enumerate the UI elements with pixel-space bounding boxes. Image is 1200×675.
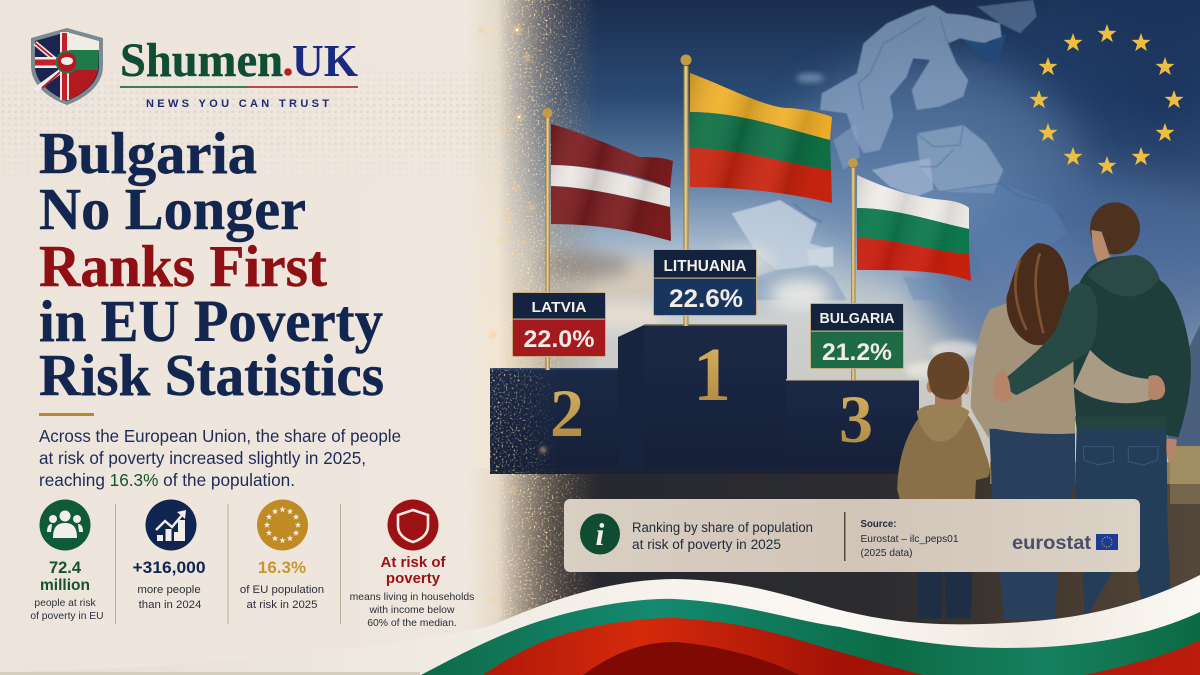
golden sparkles: over podium [486,367,558,479]
podium step 3: 3 [839,381,873,457]
title [39,120,384,408]
panel note: Ranking by share of population [632,520,813,535]
logo [31,28,358,110]
Bulgarian flag wave [0,575,1200,675]
panel note [632,520,813,552]
ground [400,446,1200,648]
flag: Latvia [542,108,673,370]
intro paragraph [39,426,401,490]
sparkle glows [479,27,545,602]
stat: 16.3%: 16.3% [258,558,306,577]
label: Latvia: 22.0% [524,326,594,353]
podium step 1 [618,324,787,469]
left cream panel fade [0,0,600,675]
wordmark: Shumen [120,34,283,87]
icon: info: i [596,516,605,552]
stat: +316,000: than in 2024 [139,599,201,611]
info panel [564,499,1140,572]
stat: at risk of poverty: with income below [369,605,455,616]
label: Bulgaria: BULGARIA [820,311,895,327]
dotted texture [2,79,497,169]
stat: 16.3%: of EU population [240,584,324,596]
wordmark [120,34,358,88]
icon: EU stars [257,500,308,550]
intro paragraph: reaching 16.3% of the population. [39,470,295,490]
source: Eurostat – ilc_peps01 [860,533,959,545]
intro paragraph: Across the European Union, the share of people [39,426,401,446]
title: Bulgaria [39,120,257,186]
source: (2025 data) [860,547,912,559]
flag: Lithuania [680,54,832,326]
source: Source: [860,518,896,530]
distant mountains [1165,325,1200,450]
icon: shield [388,500,438,550]
podium step 1: 1 [693,333,731,417]
label: Bulgaria: 21.2% [822,339,892,366]
label: Latvia: LATVIA [532,300,587,316]
stat: 72.4 million [30,500,104,622]
podium step 2: 2 [550,375,584,451]
EU star circle [1030,24,1184,174]
podium step 2 [490,368,645,469]
stat: +316,000 [132,500,206,611]
map of Europe [732,0,1067,300]
family seen from behind [897,202,1191,620]
stat: 72.4 million: 72.4 [49,559,82,577]
label: Lithuania [654,250,756,316]
stat: at risk of poverty [350,500,474,629]
clouds [540,73,980,378]
stat: 72.4 million: of poverty in EU [30,611,104,622]
title: Risk Statistics [39,342,384,408]
woman [971,243,1075,620]
label: Latvia [512,292,606,356]
icon: shield [31,28,103,105]
wordmark: UK [292,35,358,86]
title: No Longer [39,176,306,242]
stat: 72.4 million: million [40,577,90,594]
boy [897,352,990,618]
woman's sleeve [1073,350,1152,403]
source [860,518,959,559]
panel note: at risk of poverty in 2025 [632,537,781,552]
flag: Bulgaria [848,158,971,380]
stat: 72.4 million: people at risk [34,598,96,609]
man's arm [993,283,1177,463]
stat: at risk of poverty: 60% of the median. [367,618,457,629]
icon: rising chart [146,500,196,550]
stat: at risk of poverty: poverty [386,570,441,587]
title: Ranks First [39,233,327,299]
stat: at risk of poverty: At risk of [380,554,447,571]
gold rule [39,413,94,416]
man [1072,202,1191,620]
icon: people [40,500,90,550]
stat: at risk of poverty: means living in households [350,592,474,603]
golden sparkles: background [470,0,595,675]
podium [490,324,920,474]
title: in EU Poverty [39,288,383,354]
icon: info [580,514,620,554]
stat: 16.3% [240,500,324,611]
intro paragraph: at risk of poverty increased slightly in 2025, [39,448,366,468]
eurostat logo: eurostat [1012,532,1092,554]
stat: +316,000: more people [137,584,201,596]
stat: 16.3%: at risk in 2025 [247,599,317,611]
stat: +316,000: +316,000 [132,558,206,577]
label: Bulgaria [810,304,904,368]
podium step 3 [786,379,919,469]
background: sky scene [400,0,1200,480]
label: Lithuania: LITHUANIA [664,258,746,275]
label: Lithuania: 22.6% [669,285,743,313]
tagline: NEWS YOU CAN TRUST [146,98,329,110]
